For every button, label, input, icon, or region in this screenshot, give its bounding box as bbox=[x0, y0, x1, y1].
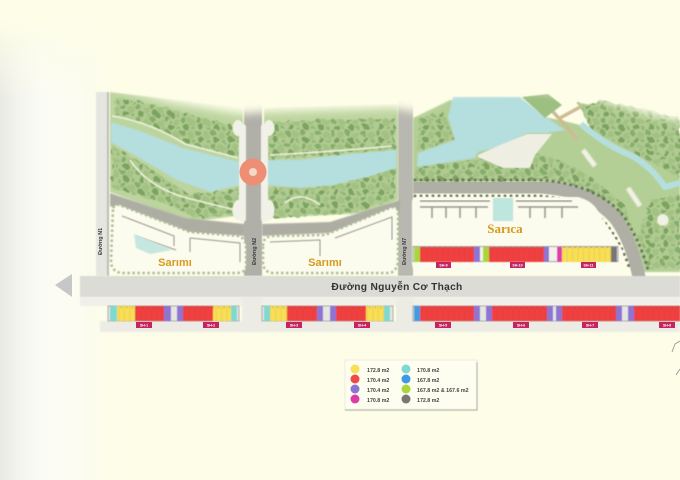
buildings bbox=[270, 217, 392, 256]
lake left bbox=[111, 122, 240, 192]
block tag: SH-4 bbox=[354, 322, 370, 328]
block tag: SH-2 bbox=[203, 322, 219, 328]
legend swatch 170.4 red: 170.4 m2 bbox=[367, 378, 389, 384]
block tag: SH-11: SH-11 bbox=[584, 264, 594, 268]
road label N7: Đường N7 bbox=[402, 238, 408, 265]
panel: Sarimi west plot bbox=[111, 205, 246, 273]
white paths bbox=[583, 150, 640, 206]
panel: Sarica plot bbox=[412, 197, 623, 272]
block tag: SH-3 bbox=[286, 322, 302, 328]
plots: SH-5 to SH-8 bbox=[413, 306, 680, 321]
roadside trees bbox=[415, 180, 648, 270]
block tag: SH-7 bbox=[582, 322, 598, 328]
shore path bbox=[112, 116, 238, 210]
plots: SH-9 to SH-11 bbox=[413, 246, 618, 262]
south east grove bbox=[638, 195, 680, 268]
plots: SH-3 and SH-4 bbox=[262, 306, 393, 321]
lower road right bbox=[262, 200, 400, 236]
corner sketch marks bbox=[672, 341, 680, 375]
panel: park left of roundabout bbox=[110, 92, 243, 222]
block tag: SH-1 bbox=[136, 322, 152, 328]
block tag: SH-9: SH-9 bbox=[439, 264, 448, 268]
legend swatch 172.8 yellow: 172.8 m2 bbox=[367, 368, 389, 374]
block tag: SH-8: SH-8 bbox=[663, 324, 671, 328]
park trees south bbox=[112, 145, 240, 218]
pool bbox=[134, 234, 172, 254]
legend bbox=[345, 360, 477, 410]
road label N1: Đường N1 bbox=[98, 228, 104, 255]
block tag: SH-5 bbox=[435, 322, 451, 328]
white clearing bbox=[657, 214, 669, 226]
arrow: road direction bbox=[55, 274, 72, 297]
buildings bbox=[122, 216, 240, 262]
park trees south bbox=[268, 168, 395, 218]
block tag: SH-9 bbox=[436, 262, 451, 268]
bridge road N2 bbox=[232, 120, 274, 222]
west grove bbox=[418, 112, 455, 152]
panel: lake and forest north east bbox=[413, 94, 680, 272]
tree belt bbox=[416, 150, 635, 235]
park lawn bbox=[264, 104, 398, 218]
park trees north bbox=[115, 97, 240, 158]
plots: SH-1 and SH-2 bbox=[108, 306, 239, 321]
panel: Sarimi east plot bbox=[263, 207, 398, 273]
main road bbox=[80, 276, 680, 297]
forest bbox=[578, 100, 680, 178]
beach bbox=[478, 134, 552, 168]
island bbox=[522, 94, 562, 118]
panel: park right of roundabout bbox=[264, 104, 398, 218]
legend swatch 167.8 blue: 167.8 m2 bbox=[417, 378, 439, 384]
lake east bbox=[417, 97, 565, 167]
block tag: SH-6: SH-6 bbox=[517, 324, 525, 328]
road name: Đường Nguyễn Cơ Thạch bbox=[331, 280, 463, 293]
legend swatch 172.8 grey: 172.8 m2 bbox=[417, 398, 439, 404]
road label N2: Đường N2 bbox=[252, 238, 258, 265]
shore path bbox=[270, 146, 392, 205]
block tag: SH-1: SH-1 bbox=[140, 324, 148, 328]
legend swatch 167.8 and 167.6 lime: 167.8 m2 & 167.6 m2 bbox=[417, 388, 469, 394]
green bank bbox=[413, 100, 680, 272]
label: Sarimi: Sarımı bbox=[158, 257, 192, 269]
block tag: SH-8 bbox=[659, 322, 675, 328]
legend swatch 170.8 magenta: 170.8 m2 bbox=[367, 398, 389, 404]
lake right bbox=[267, 150, 396, 188]
block tag: SH-11 bbox=[581, 262, 596, 268]
buildings bbox=[420, 201, 578, 218]
label: Sarica: Sarıca bbox=[487, 221, 523, 236]
legend swatch 170.4 purple: 170.4 m2 bbox=[367, 388, 389, 394]
legend swatch 170.8 teal: 170.8 m2 bbox=[417, 368, 439, 374]
block tag: SH-3: SH-3 bbox=[290, 324, 298, 328]
block tag: SH-6 bbox=[513, 322, 529, 328]
block tag: SH-7: SH-7 bbox=[586, 324, 594, 328]
roundabout bbox=[240, 158, 266, 186]
park lawn bbox=[110, 92, 243, 222]
block tag: SH-10: SH-10 bbox=[512, 264, 523, 268]
pool bbox=[493, 198, 513, 221]
top fade bbox=[109, 0, 680, 124]
road grid bbox=[80, 92, 680, 332]
lower road left bbox=[110, 193, 245, 236]
river bbox=[581, 124, 680, 187]
block tag: SH-4: SH-4 bbox=[358, 324, 366, 328]
bridge bbox=[540, 97, 582, 140]
label: Sarimi: Sarımı bbox=[308, 257, 342, 269]
park trees north bbox=[268, 118, 395, 160]
road around Sarica bbox=[413, 187, 640, 282]
block tag: SH-5: SH-5 bbox=[439, 324, 447, 328]
block tag: SH-2: SH-2 bbox=[207, 324, 215, 328]
block tag: SH-10 bbox=[510, 262, 525, 268]
